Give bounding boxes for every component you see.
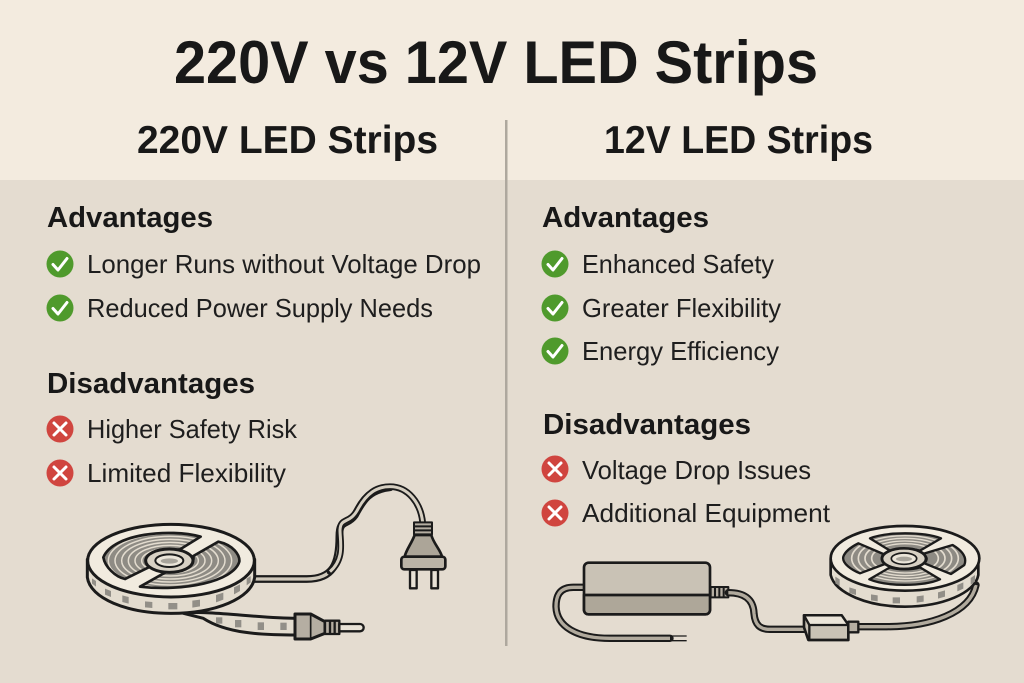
column divider — [505, 120, 508, 646]
subheading: advantages: Advantages — [542, 202, 709, 234]
panel: 220V disadvantages — [46, 368, 298, 488]
item: safety risk: Higher Safety Risk — [87, 414, 298, 444]
item: additional equipment: Additional Equipment — [582, 498, 831, 528]
item: longer runs: Longer Runs without Voltage Drop — [87, 249, 481, 279]
illustration: 12V adapter and reel — [556, 526, 979, 641]
subheading: advantages: Advantages — [47, 202, 213, 234]
subheading: disadvantages: Disadvantages — [543, 409, 751, 441]
subheading: disadvantages: Disadvantages — [47, 368, 255, 400]
icon: cable to wire ends — [556, 587, 687, 641]
item: energy efficiency: Energy Efficiency — [582, 336, 779, 366]
icon: inline connector — [804, 615, 858, 640]
icon: mains plug — [330, 487, 445, 588]
panel: 220V advantages — [46, 202, 481, 323]
panel: 12V disadvantages — [542, 409, 831, 528]
illustration: 220V reel with plug — [87, 487, 445, 639]
title: 220V vs 12V LED Strips — [174, 29, 818, 96]
panel: 12V advantages — [542, 202, 781, 366]
item: enhanced safety: Enhanced Safety — [582, 249, 774, 279]
heading: 12V column: 12V LED Strips — [604, 119, 873, 162]
item: reduced power supply: Reduced Power Supply Needs — [87, 293, 433, 323]
icon: 220V LED reel and strip end — [87, 487, 390, 639]
background: header band — [0, 0, 1024, 180]
item: limited flexibility: Limited Flexibility — [87, 458, 286, 488]
icon: power adapter — [584, 563, 728, 614]
background: content band — [0, 180, 1024, 683]
item: voltage drop: Voltage Drop Issues — [582, 455, 811, 485]
heading: 220V column: 220V LED Strips — [137, 119, 438, 162]
item: greater flexibility: Greater Flexibility — [582, 293, 781, 323]
icon: cable to connector — [728, 585, 976, 629]
icon: 12V LED reel — [831, 526, 979, 607]
